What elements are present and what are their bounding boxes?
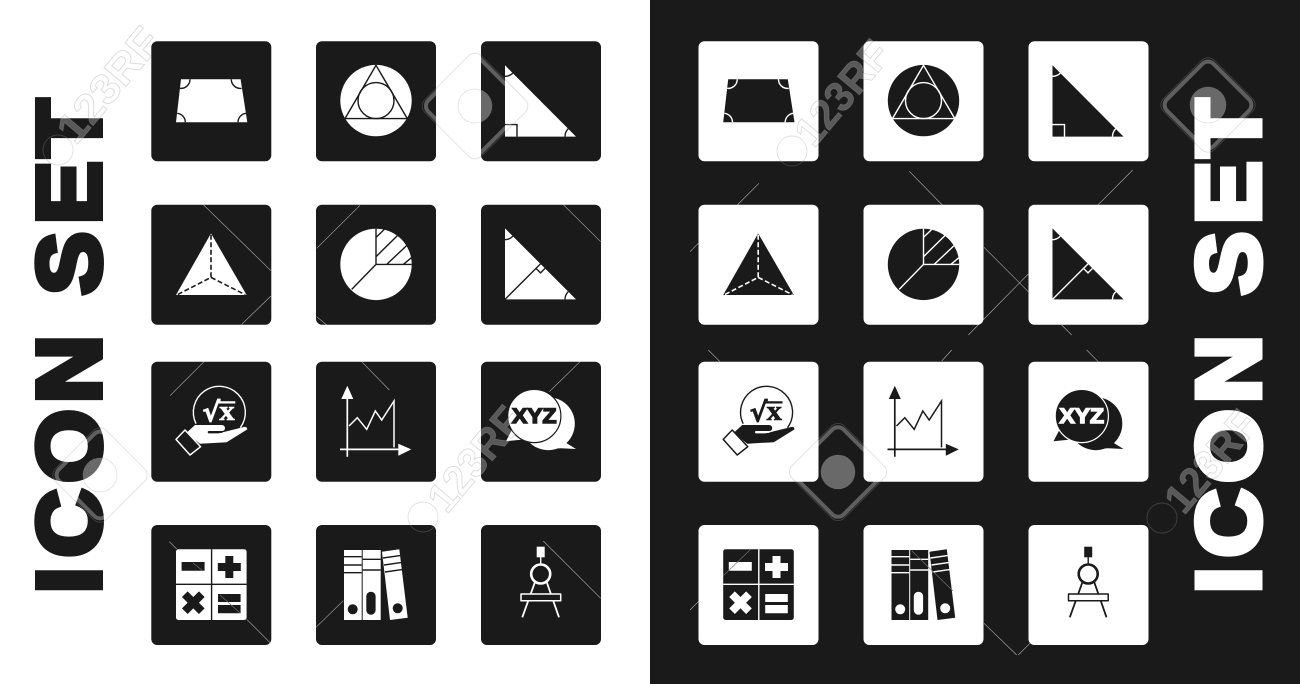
icon tile: calculator symbols, white: [698, 525, 818, 645]
icon tile: triangle in circle, white: [864, 41, 984, 161]
icon tile: binders, white: [864, 525, 984, 645]
heading: ICON SET on white: ICON SET: [18, 99, 120, 593]
watermark: large logo top centre-left: [418, 49, 532, 163]
icon tile: triangle with altitude, white: [1028, 205, 1148, 325]
icon tile: triangle in circle, dark: [316, 41, 436, 161]
icon tile: XYZ speech bubbles, white: [1028, 362, 1148, 482]
icon tile: square root in hand, white: √: [750, 398, 768, 429]
icon tile: XYZ speech bubbles, dark: XYZ: [512, 405, 557, 428]
icon tile: XYZ speech bubbles, dark: [481, 362, 601, 482]
icon tile: hatched pie chart, dark: [316, 205, 436, 325]
icon tile: triangle with altitude, dark: [481, 205, 601, 325]
panel: white left background: [0, 0, 650, 684]
heading: ICON SET on dark: ICON SET: [1177, 99, 1279, 593]
icon tile: trapezoid, dark: [151, 41, 271, 161]
watermark: 123RF bottom centre-left: 123RF: [418, 397, 532, 521]
icon tile: XYZ speech bubbles, white: XYZ: [1060, 405, 1104, 428]
icon tile: right triangle, white: [1028, 41, 1148, 161]
icon tile: pyramid, dark: [151, 205, 271, 325]
icon tile: binders, dark: [316, 525, 436, 645]
watermark: large logo top right: [1157, 54, 1259, 156]
icon tile: right triangle, dark: [481, 41, 601, 161]
watermark: 123RF lower right: 123RF: [1155, 401, 1267, 522]
icon tile: hatched pie chart, white: [864, 205, 984, 325]
icon tile: square root in hand, dark: x: [219, 395, 235, 427]
icon tile: drawing compass, white: [1028, 525, 1148, 645]
watermark: large logo lower left: [49, 424, 151, 526]
icon tile: square root in hand, white: x: [766, 395, 783, 427]
watermark: 123RF top left: 123RF: [47, 18, 170, 152]
icon tile: square root in hand, white: [698, 362, 818, 482]
icon tile: pyramid, white: [698, 205, 818, 325]
icon tile: square root in hand, dark: √: [202, 398, 221, 429]
icon tile: calculator symbols, dark: [151, 525, 271, 645]
watermark: large logo lower centre-right: [786, 420, 890, 524]
icon tile: drawing compass, dark: [481, 525, 601, 645]
icon tile: trapezoid, white: [698, 41, 818, 161]
icon tile: line chart with axes, white: [864, 362, 984, 482]
icon tile: square root in hand, dark: [151, 362, 271, 482]
watermark: 123RF top centre-right: 123RF: [785, 31, 899, 155]
panel: dark right background: [650, 0, 1300, 684]
icon tile: line chart with axes, dark: [316, 362, 436, 482]
